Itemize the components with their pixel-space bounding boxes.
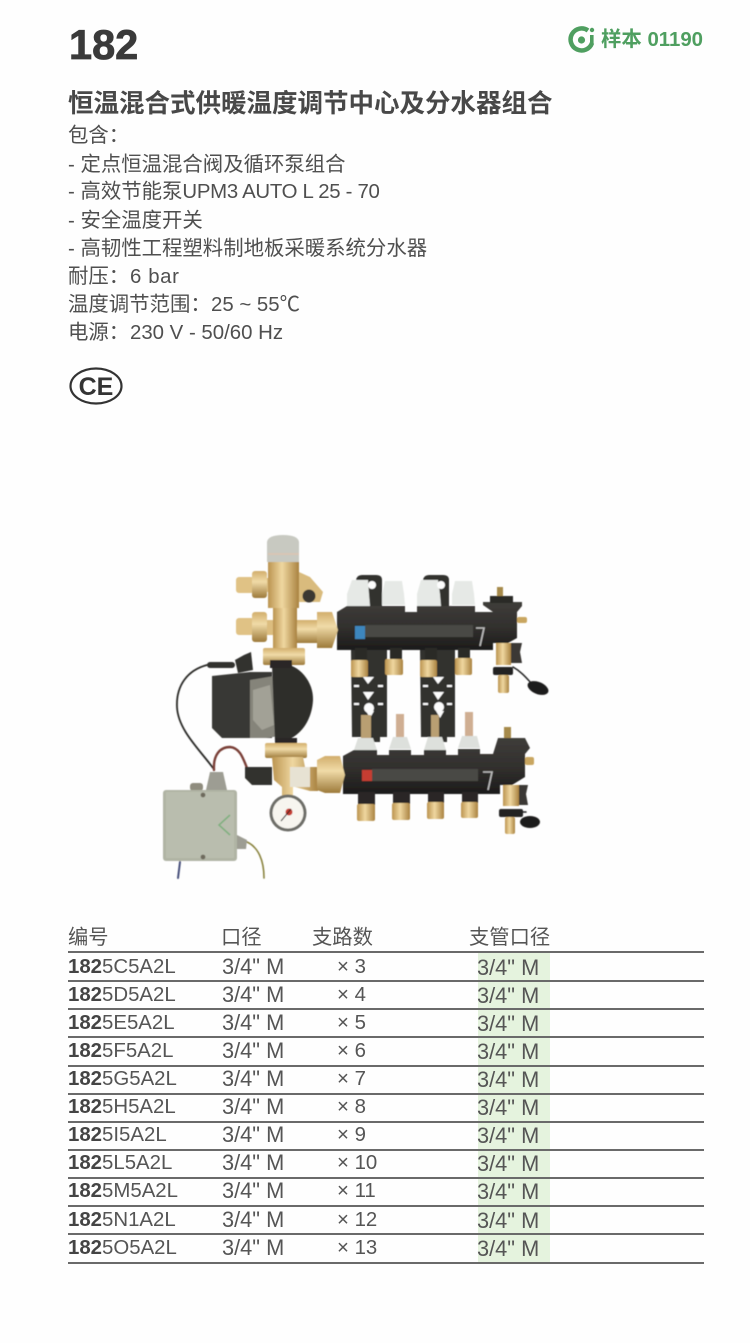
row 2: 3/4" M [477, 983, 539, 1008]
top white valve caps [347, 580, 475, 606]
row 5: × 7 [337, 1068, 366, 1090]
table column header: size: 口径 [221, 927, 262, 949]
electrical box with temperature switch [163, 772, 247, 861]
row 3: 3/4" M [477, 1011, 539, 1036]
row 8: × 10 [337, 1152, 377, 1174]
description text block: - 高效节能泵UPM3 AUTO L 25 - 70 [68, 181, 380, 203]
table column header: code: 编号 [68, 927, 109, 949]
row 9: 3/4" M [477, 1179, 539, 1204]
row 3 [68, 1010, 539, 1036]
row 4: 3/4" M [222, 1038, 284, 1063]
row 6: × 8 [337, 1096, 366, 1118]
table highlight column [478, 953, 550, 1262]
description text block [68, 124, 427, 344]
row 11 [68, 1235, 539, 1261]
top manifold [337, 587, 527, 650]
row 6: 3/4" M [477, 1095, 539, 1120]
top outlets [351, 648, 472, 677]
title: product number: 182 [69, 21, 138, 68]
row 5: 3/4" M [477, 1067, 539, 1092]
row 9: 1825M5A2L [68, 1180, 178, 1202]
row 9 [68, 1178, 539, 1204]
row 7: 3/4" M [477, 1123, 539, 1148]
description text block: 耐压： [68, 266, 129, 288]
row 2: × 4 [337, 984, 366, 1006]
row 1: 3/4" M [477, 955, 539, 980]
row 9: 3/4" M [222, 1178, 284, 1203]
row 10 [68, 1207, 539, 1233]
row 7: 3/4" M [222, 1122, 284, 1147]
icon: green logo [568, 26, 594, 53]
row 8: 3/4" M [477, 1151, 539, 1176]
description text block: 230 V - 50/60 Hz [130, 322, 283, 344]
row 8: 3/4" M [222, 1150, 284, 1175]
row 4 [68, 1038, 539, 1064]
row 10: 3/4" M [222, 1207, 284, 1232]
row 11: 3/4" M [222, 1235, 284, 1260]
table column header: branch size: 支管口径 [469, 927, 550, 949]
row 7 [68, 1122, 539, 1148]
row 5: 3/4" M [222, 1066, 284, 1091]
row 5: 1825G5A2L [68, 1068, 177, 1090]
row 1: × 3 [337, 956, 366, 978]
row 11: × 13 [337, 1237, 377, 1259]
top valve vent holes [368, 581, 445, 589]
row 10: × 12 [337, 1209, 377, 1231]
row 2 [68, 982, 539, 1008]
description text block: 电源： [68, 322, 129, 344]
description text block: - 高韧性工程塑料制地板采暖系统分水器 [68, 238, 427, 260]
row 9: × 11 [337, 1180, 376, 1202]
row 1 [68, 954, 539, 980]
pressure gauge [270, 794, 306, 832]
row 1: 3/4" M [222, 954, 284, 979]
description text block: 25 ~ 55℃ [211, 294, 300, 316]
lower brass connection [245, 743, 345, 797]
row 2: 3/4" M [222, 982, 284, 1007]
row 3: 3/4" M [222, 1010, 284, 1035]
row 3: × 5 [337, 1012, 366, 1034]
row 11: 3/4" M [477, 1236, 539, 1261]
brass mixing valve [236, 535, 338, 665]
row 6: 3/4" M [222, 1094, 284, 1119]
description text block: - 定点恒温混合阀及循环泵组合 [68, 154, 346, 176]
row 7: × 9 [337, 1124, 366, 1146]
row 6: 1825H5A2L [68, 1096, 176, 1118]
heading: 恒温混合式供暖温度调节中心及分水器组合 [68, 90, 553, 118]
row 10: 3/4" M [477, 1208, 539, 1233]
row 7: 1825I5A2L [68, 1124, 167, 1146]
description text block: - 安全温度开关 [68, 210, 203, 232]
row 10: 1825N1A2L [68, 1209, 176, 1231]
flow meters [354, 712, 480, 750]
brackets [351, 575, 455, 742]
row 11: 1825O5A2L [68, 1237, 177, 1259]
row 2: 1825D5A2L [68, 984, 176, 1006]
table column header: circuits: 支路数 [312, 927, 373, 949]
row 1: 1825C5A2L [68, 956, 176, 978]
row 6 [68, 1094, 539, 1120]
bottom manifold [343, 727, 534, 821]
catalog label: 样本 01190 [601, 29, 703, 51]
product photo illustration: manifold assembly [162, 534, 550, 880]
catalog logo and number [568, 26, 703, 53]
description text block: 6 bar [130, 266, 179, 288]
icon: CE mark: CE [79, 373, 113, 401]
row 4: 3/4" M [477, 1039, 539, 1064]
icon: CE mark [69, 367, 123, 405]
row 3: 1825E5A2L [68, 1012, 175, 1034]
bottom drain valve [499, 785, 540, 834]
description text block: 包含： [68, 125, 129, 147]
row 4: × 6 [337, 1040, 366, 1062]
row 4: 1825F5A2L [68, 1040, 173, 1062]
circulation pump [207, 652, 313, 745]
cables [177, 665, 534, 878]
top drain valve [493, 643, 550, 698]
row 8 [68, 1150, 539, 1176]
description text block: 温度调节范围： [68, 294, 211, 316]
row 8: 1825L5A2L [68, 1152, 172, 1174]
row 5 [68, 1066, 539, 1092]
